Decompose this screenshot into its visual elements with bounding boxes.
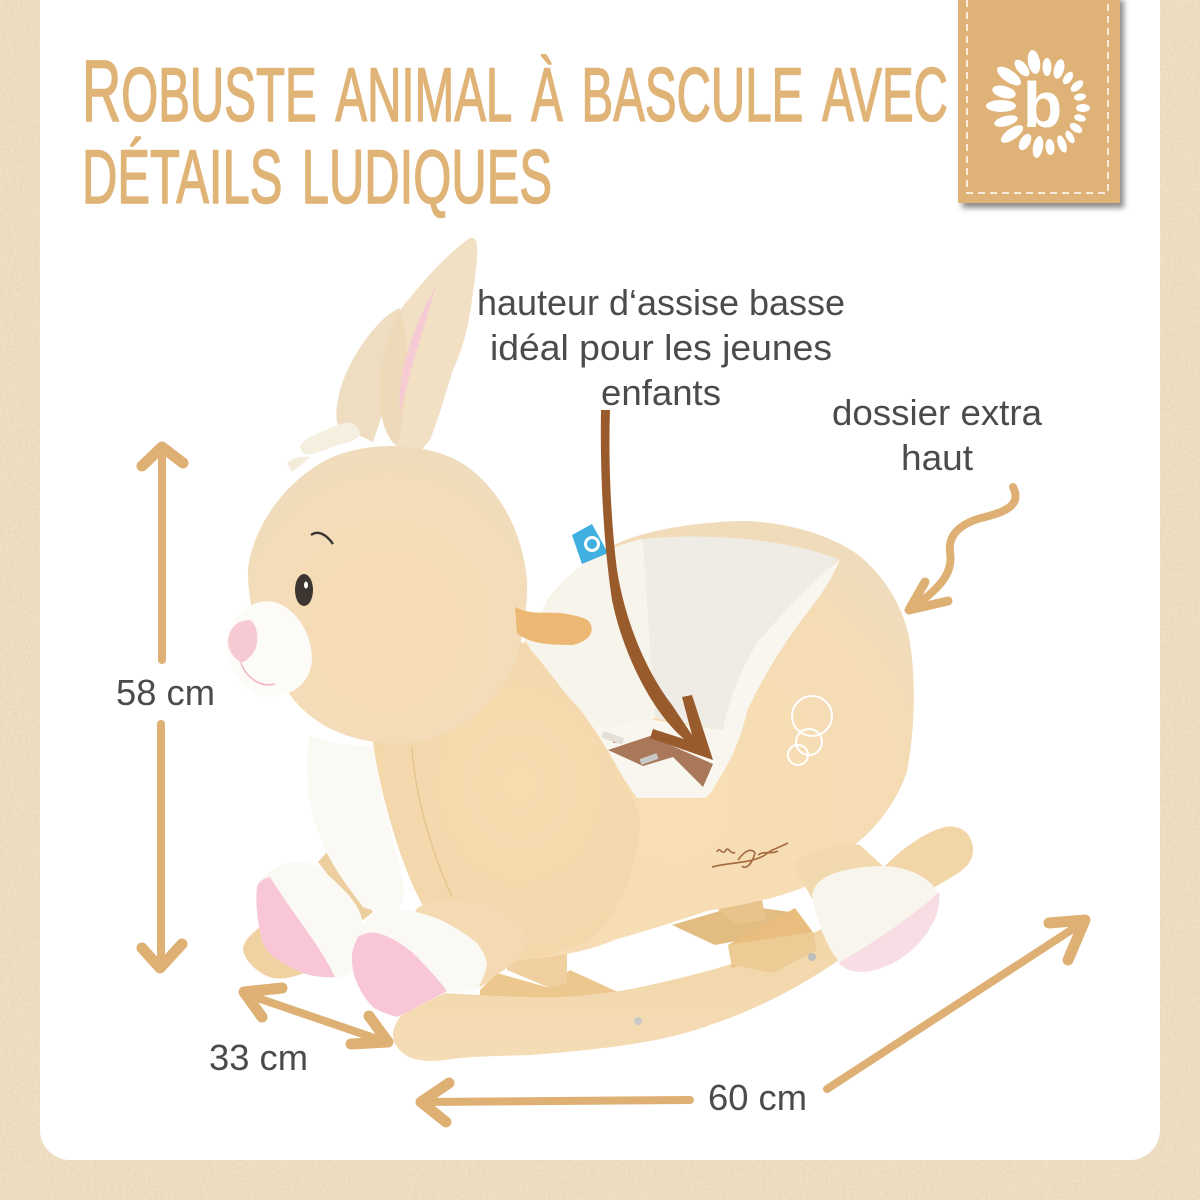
brand tag with logo: b: [1023, 69, 1062, 141]
eye: [295, 574, 313, 606]
near foot: [352, 909, 487, 1017]
ribbon loop: [287, 422, 360, 472]
white belly: [307, 736, 404, 912]
arrow: height down: [142, 724, 182, 968]
arrow: width left: [421, 1083, 690, 1122]
depth label: 33 cm: [209, 1037, 308, 1078]
head: [248, 446, 527, 743]
muzzle: [227, 601, 312, 697]
main rocker: [393, 925, 860, 1061]
far rocker and wooden base: [243, 900, 790, 1005]
width measure: [421, 920, 1085, 1122]
title: [82, 23, 948, 226]
seat interior: [525, 536, 840, 798]
width label: 60 cm: [708, 1077, 807, 1118]
arrow: width right: [827, 920, 1085, 1089]
thigh: [415, 900, 527, 987]
front ear: [379, 238, 477, 460]
rear rocker tip: [885, 827, 973, 905]
height label: 58 cm: [116, 672, 215, 713]
depth measure: [209, 988, 388, 1078]
wooden handle: [515, 607, 592, 645]
rear leg and foot: [793, 844, 939, 972]
seat body: [480, 521, 914, 960]
embroidered signature: [712, 843, 788, 867]
far leg: [318, 852, 373, 920]
callout: low seat height: enfants: [601, 372, 721, 413]
footrest platform: [728, 908, 817, 973]
embroidered bubbles: [788, 696, 832, 765]
chest highlight body: [372, 640, 640, 961]
height measure: [116, 447, 215, 968]
far foot: [256, 862, 362, 978]
rocking rabbit toy: [227, 238, 973, 1061]
harness strap: [601, 731, 713, 787]
title: détails ludiques: [82, 105, 552, 226]
arrow: height up: [142, 447, 183, 660]
callout: low seat height: [477, 282, 845, 413]
callout: low seat height: hauteur d‘assise basse: [477, 282, 845, 323]
brown callout arrow: [601, 410, 713, 760]
callout: extra high backrest: dossier extra: [832, 392, 1043, 433]
back ear: [336, 308, 400, 442]
seam line: [412, 747, 452, 897]
brand tag with logo: [958, 0, 1124, 208]
blue label: [572, 524, 608, 564]
callout: extra high backrest: [832, 392, 1043, 478]
callout: extra high backrest: haut: [901, 437, 973, 478]
arrow: depth: [244, 988, 388, 1044]
arrow: backrest: [909, 487, 1015, 610]
eyebrow: [311, 533, 333, 544]
callout: low seat height: idéal pour les jeunes: [490, 327, 832, 368]
